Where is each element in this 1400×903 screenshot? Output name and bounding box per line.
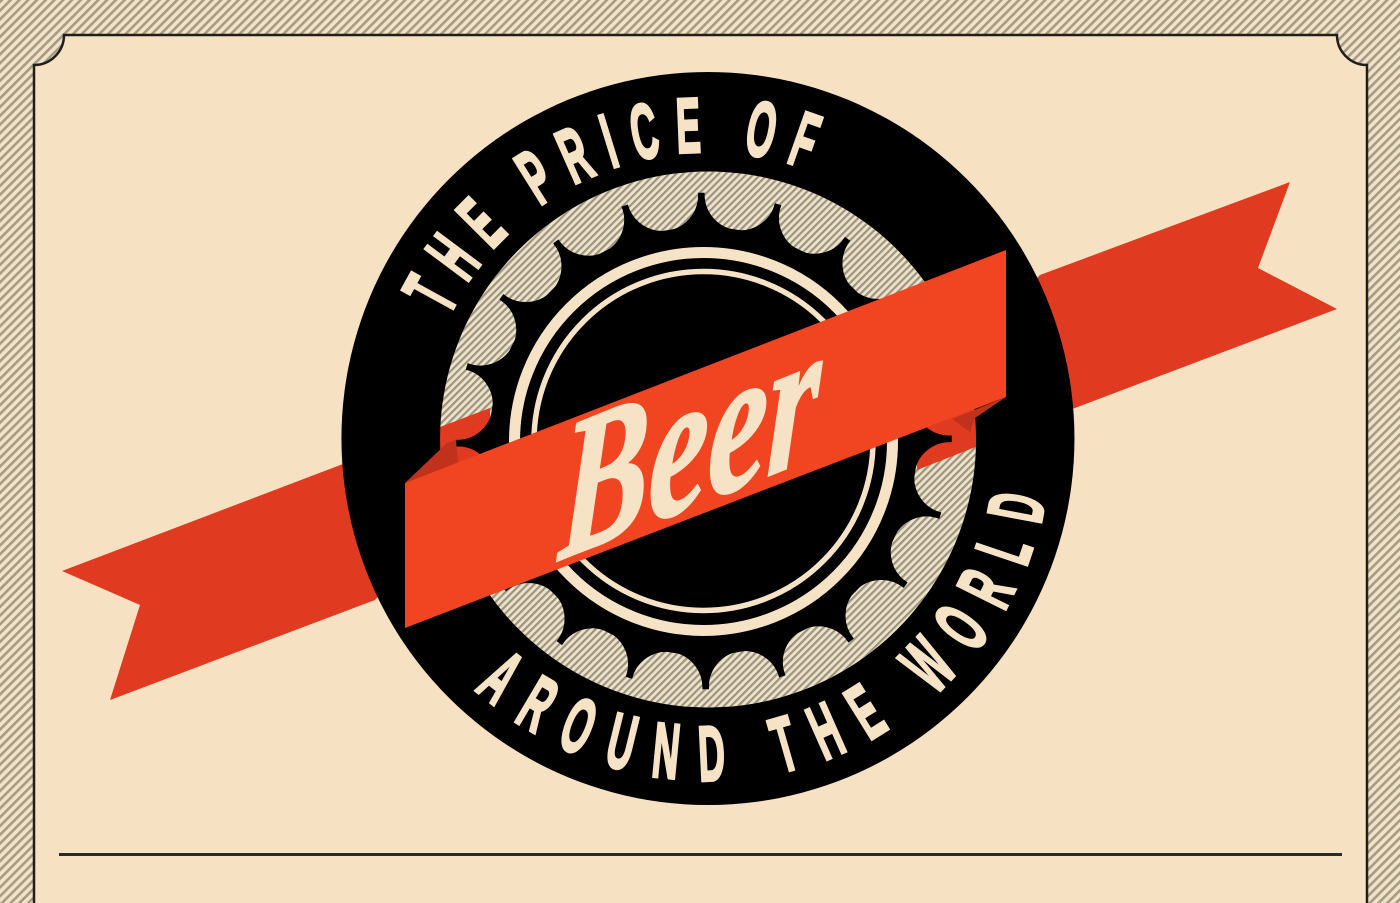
bottle cap gear [443,180,964,702]
left ribbon fold [405,440,458,483]
banner word: Beer: Beer [555,277,826,605]
back ribbon: right tail [917,182,1337,470]
cap outer cream ring [514,252,892,630]
right ribbon fold [952,397,1006,432]
section divider rule [59,853,1342,856]
back ribbon: left tail [62,408,490,700]
badge black outer ring [341,72,1074,805]
arched heading: The Price Of: THE PRICE OF [400,96,824,311]
front banner [405,250,1006,628]
arched heading: Around The World: AROUND THE WORLD [473,494,1044,782]
hatched disc behind gear [440,172,976,708]
cap inner cream ring [534,272,873,610]
